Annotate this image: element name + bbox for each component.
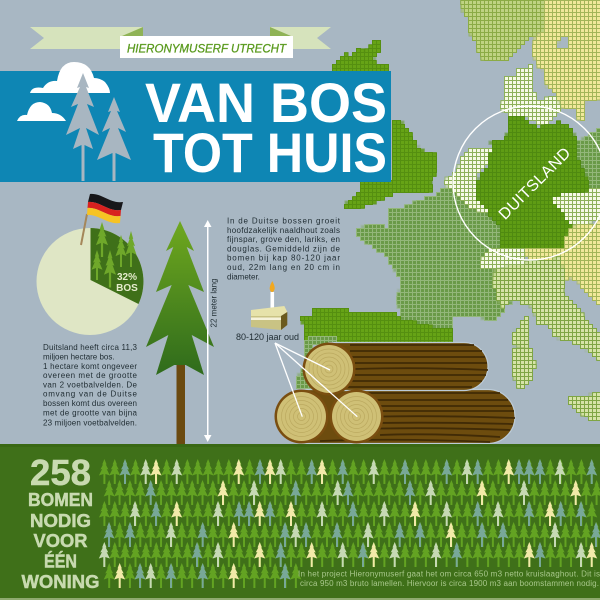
logs pile (274, 342, 515, 444)
map: Italy (494, 258, 600, 360)
height label: 22 meter lang (210, 279, 218, 327)
text: project timber volume: In het project Hieronymuserf gaat het om circa 650 m3 netto kruislaaghout. Dit is (298, 570, 600, 578)
map: Spain (300, 307, 453, 345)
text: project timber volume (298, 570, 600, 588)
pie label: 32% (117, 272, 137, 283)
text: forest area in Germany: overeen met de grootte (43, 371, 138, 380)
pie chart: 32% forest (36, 222, 144, 335)
ribbon (30, 27, 331, 49)
map: France (356, 187, 512, 327)
text: forest area in Germany: van 2 voetbalvelden. De (43, 380, 138, 389)
subtitle plate: HIERONYMUSERF UTRECHT (127, 42, 288, 56)
headline: 258 trees: WONING (22, 571, 100, 592)
map: Scotland (333, 40, 390, 72)
text: German conifers: diameter. (227, 272, 260, 281)
pie trees (92, 222, 136, 288)
pie label (116, 272, 138, 294)
text: forest area in Germany: 1 hectare komt ongeveer (43, 362, 137, 371)
map: Sardinia (513, 349, 535, 389)
bottom band (0, 444, 600, 600)
text: German conifers: oud, 22m lang en 20 cm in (227, 263, 340, 272)
text: German conifers: douglas. Gemiddeld zijn de (227, 244, 341, 253)
text: forest area in Germany: bossen komt dus overeen (43, 399, 137, 408)
map: Balkans (523, 222, 600, 307)
headline: 258 trees: VOOR (34, 530, 88, 551)
text: forest area in Germany: met de grootte van bijna (43, 408, 138, 418)
headline: 258 trees: ÉÉN (44, 550, 77, 572)
upper log grain (345, 345, 488, 387)
subtitle plate (120, 36, 293, 58)
map: Finland and Baltics (533, 0, 600, 120)
map of Europe (296, 0, 600, 420)
text: forest area in Germany: Duitsland heeft circa 11,3 (43, 343, 138, 352)
map: Eastern Alps (550, 188, 600, 227)
headline: 258 trees: NODIG (30, 510, 91, 531)
Germany highlight circle (453, 106, 600, 260)
text: German conifers (227, 216, 341, 281)
big pine tree (146, 221, 214, 445)
pale trees (99, 459, 587, 588)
title banner (0, 71, 391, 182)
icon: German flag (81, 194, 123, 245)
text: German conifers: hoofdzakelijk naaldhout zoals (227, 226, 340, 235)
map: Central Europe (577, 128, 600, 190)
map: England (343, 120, 437, 210)
height arrow: 22 meter (204, 220, 218, 442)
text: German conifers: In de Duitse bossen groeit (227, 216, 341, 226)
icon: clouds (17, 62, 110, 121)
title: VAN BOS (145, 71, 387, 134)
map: Denmark (500, 65, 560, 125)
top log end (302, 342, 356, 396)
map: Sicily (568, 393, 600, 420)
map: Germany (478, 117, 590, 247)
text: forest area in Germany: omvang van de Duitse (43, 390, 138, 399)
blue-grey trees (104, 459, 600, 588)
pie label: BOS (116, 283, 138, 294)
headline: 258 trees: BOMEN (28, 489, 93, 510)
pointer lines from age label to log rings (275, 343, 357, 417)
bottom-middle log end (330, 390, 384, 444)
text: German conifers: fijnspar, grove den, lariks, en (227, 235, 340, 244)
text: forest area in Germany (43, 343, 138, 428)
map: Corsica (513, 316, 530, 347)
green tree rows (99, 459, 600, 588)
headline: 258 trees: 258 (30, 452, 91, 493)
text: German conifers: bomen bij kap 80-120 jaar (227, 254, 340, 263)
Germany label: DUITSLAND (496, 145, 574, 223)
tree field (99, 459, 600, 588)
title: TOT HUIS (153, 121, 387, 184)
title (145, 71, 387, 184)
icon: grey pine trees (66, 73, 131, 181)
text: forest area in Germany: miljoen hectare bos. (43, 352, 115, 362)
headline: 258 trees (22, 452, 100, 592)
lower log grain (320, 393, 515, 442)
map: Low Countries (445, 147, 495, 213)
age label: 80-120 jaar oud (236, 332, 299, 342)
map: Switzerland (480, 247, 525, 268)
map: Portugal (296, 337, 335, 390)
bottom-left log end (274, 390, 328, 444)
yellow trees (114, 459, 597, 588)
text: forest area in Germany: 23 miljoen voetbalvelden. (43, 418, 137, 428)
map: Scandinavia (462, 0, 545, 62)
icon: birthday cake (251, 281, 287, 330)
text: project timber volume: circa 950 m3 bruto lamellen. Hiervoor is circa 1900 m3 aan boomstammen nodig. (300, 579, 599, 588)
